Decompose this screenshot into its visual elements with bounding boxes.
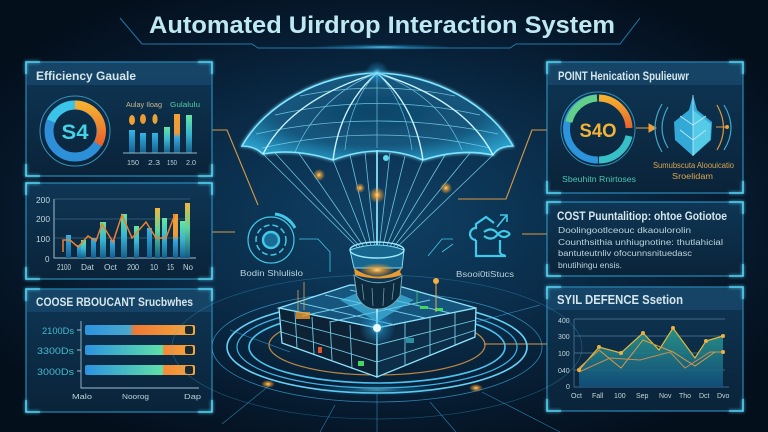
title [120,12,640,50]
label: left sensor: Bodin Shlulislo [240,269,304,278]
area line chart [574,319,729,387]
bar labels: 3000Ds [37,367,74,378]
body text: Doolingootlceouc dkaoulorolin [558,226,691,235]
panel: cost breakdown bars [26,289,212,412]
floating sparks [313,155,452,203]
gauge ring: S4 [62,121,89,144]
axis labels: 15 [167,263,174,272]
panel: point notification summary [547,62,743,193]
heading: point notification: POINT Henication Spulieuwr [558,69,689,83]
line series [63,214,175,252]
bar labels: 3300Ds [37,346,74,357]
shield caption [653,161,735,181]
shield caption: Sumubscuta Aloouicatio [653,161,735,170]
panel: cost breakdown bars: Dap [184,392,201,401]
panel: cost breakdown bars: Malo [72,392,92,401]
arrow [636,124,656,132]
suspension lines [263,150,493,250]
body text [558,226,723,270]
score gauge [561,92,635,166]
axis labels: 0 [45,255,50,264]
connector lines [212,130,547,344]
chart axis labels: 0 [566,384,570,391]
bar labels: 2100Ds [42,326,74,337]
body text: Counthsithia unhiugnotine: thutlahicial [558,238,723,247]
bars [66,203,190,258]
bar chart: efficiency: 150 [127,160,139,167]
axis labels: 200 [36,215,51,224]
title: Automated Uirdrop Interaction System [149,12,615,39]
shield caption: Sroelidam [672,172,713,181]
heading: defence: SYIL DEFENCE Ssetion [557,293,683,307]
panel: cost text [547,202,743,276]
platform block [279,285,476,377]
bar chart: efficiency: Gulalulu [170,102,200,109]
ground rings [172,275,582,432]
axis labels: 2100 [57,263,71,272]
chart axis labels: 100 [558,351,570,358]
beacon pins [298,278,439,312]
chart axis labels: Dvo [717,393,730,400]
gauge ring [40,96,110,166]
heading: cost: COST Puuntalitiop: ohtoe Gotiotoe [557,209,727,223]
chart axis labels: Tho [679,393,691,400]
gauge caption: Sbeuhitn Rnirtoses [562,175,636,184]
bar chart: efficiency: 2.3 [148,160,160,167]
ring highlights [261,380,483,396]
bar labels [37,326,74,378]
panel: civil defence section [547,287,743,411]
chart axis labels: 100 [614,393,626,400]
body text: bantuteutnliv ofocunnsnituedasc [558,249,692,258]
panel: combo chart [26,183,212,279]
icon: radar sensor [248,214,330,272]
chart axis labels: Dct [699,393,710,400]
panel: cost breakdown bars: Noorog [122,392,149,401]
chart axis labels: Nov [659,393,672,400]
bar chart: efficiency: 2.0 [186,160,196,167]
chart axis labels: Oct [571,393,582,400]
axis labels [36,196,194,272]
heading: cost breakdown: COOSE RBOUCANT Srucbwhes [36,295,193,309]
score gauge: S4O [580,121,616,142]
bar chart: efficiency: Aulay Iloag [126,102,162,109]
delivery pod [350,242,404,309]
icon: puzzle network [428,215,510,256]
chart axis labels: 300 [558,334,570,341]
chart axis labels: Fall [592,393,604,400]
parachute canopy [242,61,513,160]
horizontal bars [77,321,199,388]
chart axis labels: 040 [558,368,570,375]
chart axis labels [558,318,730,400]
axis labels: 10 [150,263,158,272]
chart axis labels: Sep [636,393,649,400]
energy core [359,309,395,346]
label: right network: Bsooi0tiStucs [456,270,514,279]
axis labels: Dat [81,263,95,272]
axis labels: Oct [104,263,118,272]
axes and gridlines [54,199,196,258]
icon: shield leaf [655,95,731,156]
body text: bnutihingu ensis. [558,261,622,270]
panel: efficiency gauge [26,62,212,176]
bar chart: efficiency [123,102,200,167]
axis labels: No [183,263,194,272]
axis labels: 200 [127,263,139,272]
axis labels: 200 [36,196,51,205]
axis labels: 100 [36,235,51,244]
bar chart: efficiency: 150 [167,160,177,167]
chart axis labels: 400 [558,318,570,325]
heading: efficiency gauge: Efficiency Gauale [36,69,136,83]
